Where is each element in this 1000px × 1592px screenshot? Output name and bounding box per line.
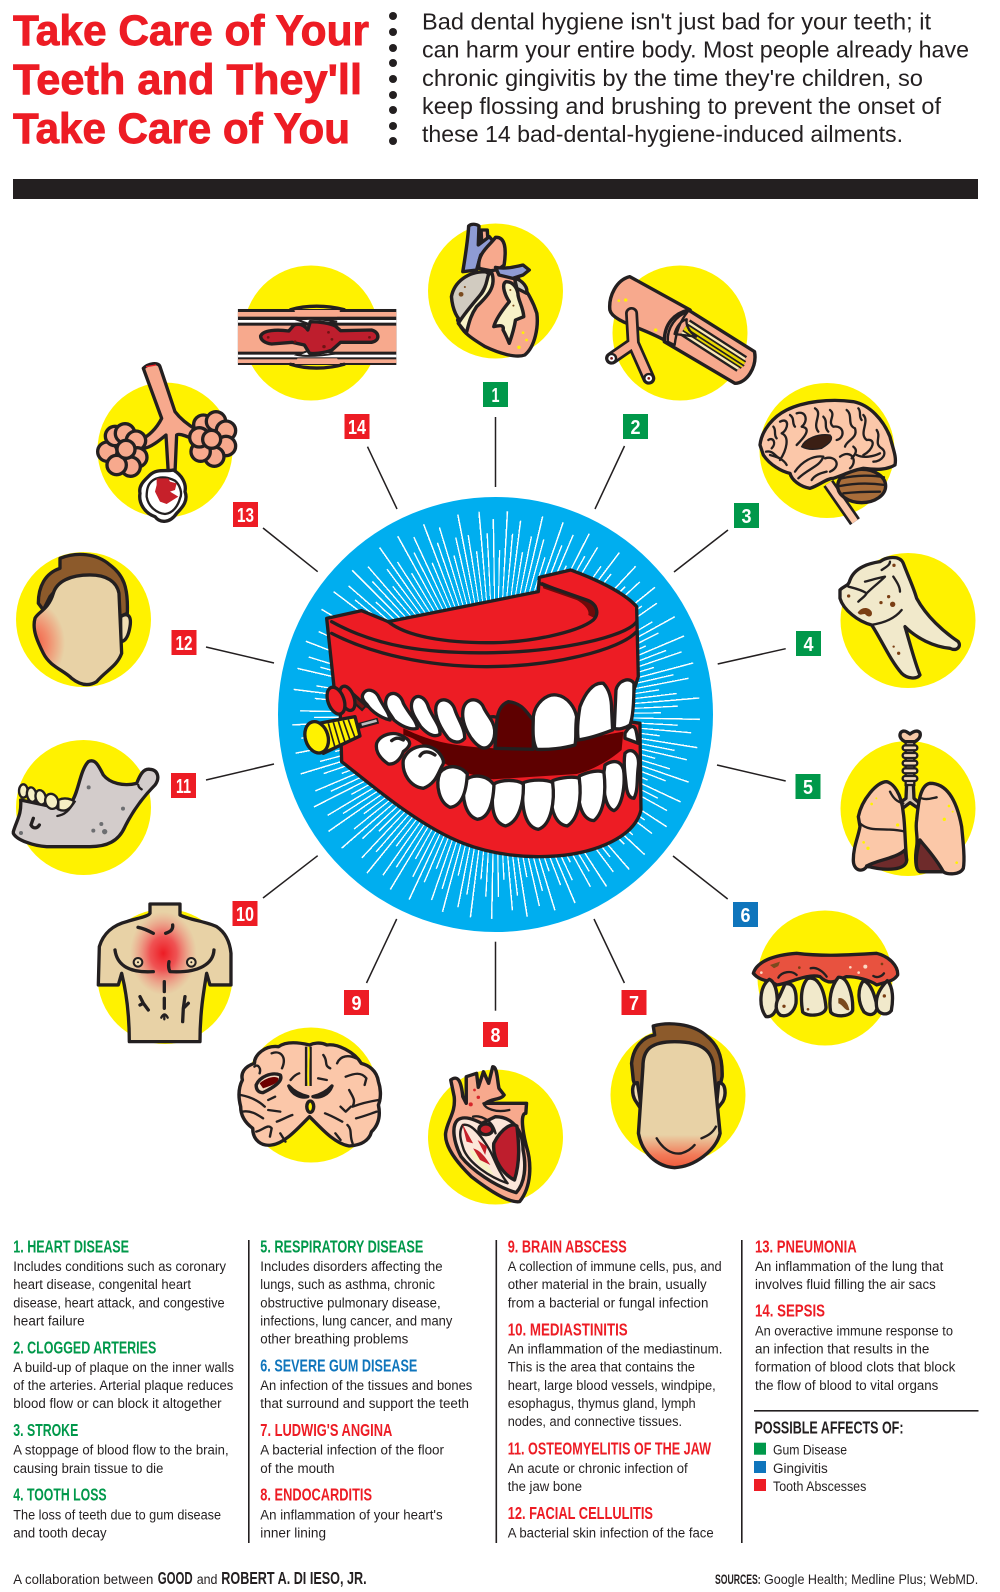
icon: pneumonia alveoli <box>98 364 236 521</box>
entry 11: osteomyelitis of the jaw: An acute or chronic infection of <box>508 1461 688 1476</box>
lower teeth <box>376 726 639 829</box>
icon: facial cellulitis <box>34 554 130 685</box>
icon: sepsis blood vessel <box>238 306 396 368</box>
intro text: chronic gingivitis by the time they're children, so <box>422 65 923 91</box>
dotted divider <box>389 12 397 145</box>
entry 2: clogged arteries: 2. CLOGGED ARTERIES <box>13 1337 156 1357</box>
title: Take Care of Your <box>13 7 369 55</box>
entry 5: respiratory disease <box>260 1237 453 1347</box>
entry 3: stroke <box>13 1420 229 1476</box>
entry 10: mediastinitis: nodes, and connective tissues. <box>508 1414 682 1429</box>
number tags: 9 <box>352 993 362 1015</box>
footer: collaboration credit: GOOD <box>158 1568 193 1588</box>
icon: heart disease <box>451 224 537 356</box>
number tags: 7 <box>629 993 639 1015</box>
number tags: 4 <box>804 634 814 656</box>
entry 8: endocarditis: An inflammation of your heart's <box>260 1507 443 1522</box>
black header bar <box>13 179 978 199</box>
icon: brain abscess <box>239 1043 380 1146</box>
footer: collaboration credit <box>13 1568 367 1588</box>
mouth interior <box>403 728 623 779</box>
legend: Gum Disease <box>773 1443 847 1458</box>
entry 4: tooth loss: 4. TOOTH LOSS <box>13 1485 107 1505</box>
upper plate ridges <box>332 622 637 653</box>
number tags: 13 <box>237 505 254 527</box>
entry 2: clogged arteries: A build-up of plaque on the inner walls <box>13 1360 234 1375</box>
entry 13: pneumonia: involves fluid filling the air sacs <box>755 1277 936 1292</box>
entry 7: Ludwig's angina: 7. LUDWIG'S ANGINA <box>260 1420 393 1440</box>
entry 14: sepsis: An overactive immune response to <box>755 1323 953 1338</box>
entry 5: respiratory disease: lungs, such as asthma, chronic <box>260 1277 435 1292</box>
entry 1: heart disease: heart failure <box>13 1314 85 1328</box>
entry 2: clogged arteries <box>13 1337 234 1411</box>
entry 13: pneumonia: An inflammation of the lung that <box>755 1259 944 1274</box>
entry 9: brain abscess: other material in the brain, usually <box>508 1277 707 1292</box>
number tags: 2 <box>630 417 640 439</box>
entry 13: pneumonia <box>755 1237 944 1292</box>
entry 14: sepsis <box>755 1301 956 1393</box>
yellow circles behind the icons <box>16 224 976 1204</box>
entry 3: stroke: A stoppage of blood flow to the brain, <box>13 1443 229 1458</box>
icon: clogged arteries <box>607 277 755 383</box>
number tags: 11 <box>176 776 191 798</box>
entry 1: heart disease: heart disease, congenital heart <box>13 1277 191 1292</box>
legend: POSSIBLE AFFECTS OF: <box>754 1417 904 1437</box>
entry 11: osteomyelitis of the jaw: the jaw bone <box>508 1479 582 1494</box>
entry 6: severe gum disease: 6. SEVERE GUM DISEASE <box>260 1356 417 1376</box>
entry 1: heart disease: disease, heart attack, and congestive <box>13 1295 225 1310</box>
legend <box>754 1410 978 1494</box>
title: Teeth and They'll <box>13 56 362 104</box>
footer: sources: Google Health; Medline Plus; WebMD. <box>764 1572 978 1587</box>
entry 8: endocarditis: 8. ENDOCARDITIS <box>260 1485 372 1505</box>
intro text: these 14 bad-dental-hygiene-induced ailments. <box>422 121 903 147</box>
entry 14: sepsis: 14. SEPSIS <box>755 1301 825 1321</box>
entry 2: clogged arteries: blood flow or can block it altogether <box>13 1396 222 1411</box>
entry 4: tooth loss <box>13 1485 221 1540</box>
number tags: 1 <box>492 385 500 407</box>
entry 1: heart disease: 1. HEART DISEASE <box>13 1237 129 1257</box>
column divider lines <box>248 1240 743 1543</box>
number tags: 6 <box>740 905 750 927</box>
entry 5: respiratory disease: obstructive pulmonary disease, <box>260 1295 441 1310</box>
entry 2: clogged arteries: of the arteries. Arterial plaque reduces <box>13 1378 234 1393</box>
icon: osteomyelitis jaw <box>13 761 158 847</box>
entry 10: mediastinitis <box>508 1319 722 1429</box>
lower jaw <box>340 703 641 857</box>
footer: sources: SOURCES: <box>715 1572 761 1587</box>
entry 1: heart disease: Includes conditions such as coronary <box>13 1259 226 1274</box>
entry 10: mediastinitis: heart, large blood vessels, windpipe, <box>508 1378 716 1393</box>
entry 14: sepsis: the flow of blood to vital organs <box>755 1378 939 1393</box>
entry 11: osteomyelitis of the jaw: 11. OSTEOMYELITIS OF THE JAW <box>508 1438 711 1458</box>
entry 7: Ludwig's angina: A bacterial infection of the floor <box>260 1443 445 1458</box>
intro text: can harm your entire body. Most people already have <box>422 36 969 62</box>
footer: collaboration credit: A collaboration between <box>13 1572 153 1587</box>
number tags: 14 <box>348 417 367 439</box>
icon: mediastinitis torso <box>98 904 231 1042</box>
title <box>13 7 369 153</box>
icon: tooth loss <box>840 557 959 678</box>
icon: stroke brain <box>760 400 895 522</box>
connector lines <box>206 417 786 1011</box>
entry 4: tooth loss: and tooth decay <box>13 1526 107 1540</box>
icon: severe gum disease <box>753 953 898 1017</box>
entry 12: facial cellulitis: A bacterial skin infection of the face <box>508 1526 714 1540</box>
central blue burst with radiating lines <box>278 497 713 932</box>
entry 10: mediastinitis: esophagus, thymus gland, lymph <box>508 1396 696 1411</box>
entry 3: stroke: 3. STROKE <box>13 1420 78 1440</box>
upper jaw <box>327 570 638 723</box>
entry 8: endocarditis <box>260 1485 443 1540</box>
entry 14: sepsis: an infection that results in the <box>755 1342 929 1356</box>
footer: collaboration credit: and <box>197 1572 217 1587</box>
entry 5: respiratory disease: other breathing problems <box>260 1332 409 1347</box>
entry 4: tooth loss: The loss of teeth due to gum disease <box>13 1507 221 1522</box>
entry 13: pneumonia: 13. PNEUMONIA <box>755 1237 857 1257</box>
number tags: 5 <box>803 777 813 799</box>
number tags: 3 <box>742 506 752 528</box>
entry 9: brain abscess: 9. BRAIN ABSCESS <box>508 1237 627 1257</box>
entry 3: stroke: causing brain tissue to die <box>13 1461 163 1476</box>
entry 10: mediastinitis: An inflammation of the mediastinum. <box>508 1342 722 1356</box>
illustration: wind-up chattering dentures <box>301 570 641 857</box>
entry 9: brain abscess: A collection of immune cells, pus, and <box>508 1259 722 1274</box>
number tags: 10 <box>236 904 254 926</box>
entry 6: severe gum disease: An infection of the tissues and bones <box>260 1378 473 1393</box>
icon: endocarditis heart <box>446 1067 530 1202</box>
entry 5: respiratory disease: Includes disorders affecting the <box>260 1259 443 1274</box>
icon: Ludwig's angina face <box>632 1024 725 1168</box>
entry 8: endocarditis: inner lining <box>260 1526 326 1540</box>
entry 12: facial cellulitis <box>508 1503 714 1540</box>
entry 9: brain abscess: from a bacterial or fungal infection <box>508 1295 708 1310</box>
entry 12: facial cellulitis: 12. FACIAL CELLULITIS <box>508 1503 653 1523</box>
wind-up key <box>348 693 365 708</box>
central gum gap <box>495 702 533 749</box>
entry 11: osteomyelitis of the jaw <box>508 1438 711 1494</box>
entry 1: heart disease <box>13 1237 226 1328</box>
intro text: Bad dental hygiene isn't just bad for your teeth; it <box>422 8 931 34</box>
number tags <box>171 382 821 1047</box>
entry 6: severe gum disease <box>260 1356 473 1411</box>
number tags: 12 <box>176 633 192 655</box>
icon: respiratory disease lungs <box>853 731 964 874</box>
title: Take Care of You <box>13 105 350 153</box>
intro text <box>422 8 969 147</box>
entry 5: respiratory disease: infections, lung cancer, and many <box>260 1314 453 1328</box>
entry 5: respiratory disease: 5. RESPIRATORY DISEASE <box>260 1237 423 1257</box>
entry 7: Ludwig's angina <box>260 1420 445 1476</box>
entry 10: mediastinitis: This is the area that contains the <box>508 1360 695 1375</box>
upper teeth <box>362 680 634 749</box>
legend: Gingivitis <box>773 1461 828 1476</box>
entry 7: Ludwig's angina: of the mouth <box>260 1461 335 1476</box>
entry 6: severe gum disease: that surround and support the teeth <box>260 1396 469 1411</box>
entry 10: mediastinitis: 10. MEDIASTINITIS <box>508 1319 628 1339</box>
number tags: 8 <box>490 1025 500 1047</box>
intro text: keep flossing and brushing to prevent the onset of <box>422 93 941 119</box>
entry 14: sepsis: formation of blood clots that block <box>755 1360 956 1375</box>
legend: Tooth Abscesses <box>773 1479 867 1494</box>
entry 9: brain abscess <box>508 1237 722 1310</box>
footer: collaboration credit: ROBERT A. DI IESO, JR. <box>221 1568 367 1588</box>
